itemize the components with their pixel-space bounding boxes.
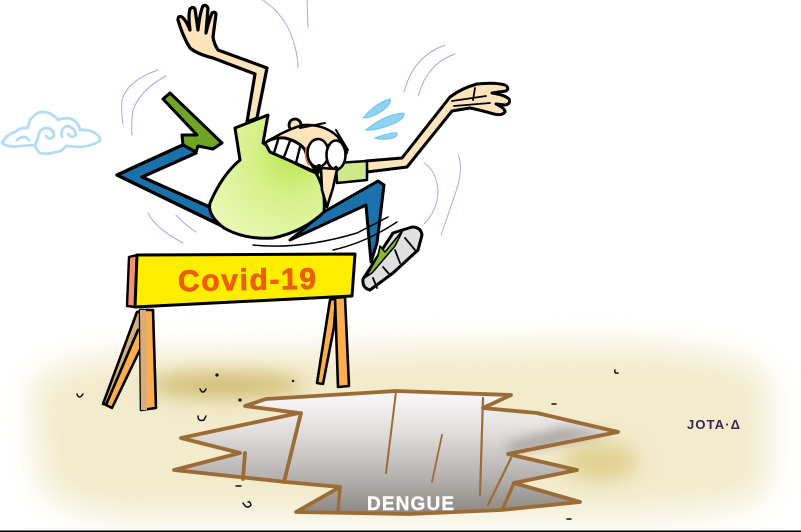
hole fill: [174, 391, 618, 514]
icon: sweat drops: [363, 99, 404, 139]
speed lines near knee: [253, 217, 397, 250]
front leg: [290, 181, 384, 262]
hurdle label: Covid-19: [178, 263, 316, 298]
motion lines: [122, 0, 461, 243]
head: [265, 119, 348, 207]
hurdle legs: [103, 297, 349, 410]
hole cracks: [243, 392, 514, 512]
raised arm and hand: [178, 5, 267, 122]
figure: falling man: [117, 5, 510, 290]
outstretched arm and hand: [366, 83, 510, 172]
hurdle: Covid-19: [103, 254, 355, 410]
nose: [321, 168, 337, 207]
pebbles: [77, 370, 618, 519]
ground: sandy soil: [32, 345, 770, 517]
hole outline: [174, 391, 618, 514]
eyes: [308, 139, 328, 167]
hole label: DENGUE: [367, 494, 454, 515]
mouth and teeth: [265, 138, 318, 173]
front shoe: [363, 227, 422, 290]
hurdle board: [135, 254, 355, 307]
bent leg: [117, 143, 250, 232]
signature: JOTA·Δ: [687, 417, 740, 432]
raised shoe: [163, 93, 222, 152]
shirt sleeve: [336, 161, 367, 183]
icon: cloud: [2, 112, 100, 154]
bottom border: [0, 530, 801, 532]
hurdle board end: [127, 255, 137, 307]
shirt body: [210, 115, 324, 238]
hole shading: [505, 428, 612, 452]
hole: Dengue: [174, 391, 618, 515]
